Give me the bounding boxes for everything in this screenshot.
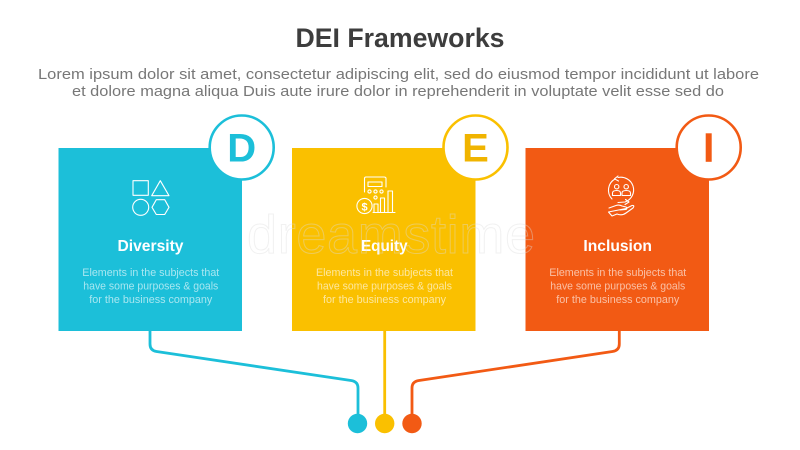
connector: diversity line — [150, 331, 358, 416]
dot: inclusion — [402, 414, 422, 433]
watermark: dreamstime — [247, 205, 535, 265]
icon: shapes — [133, 181, 169, 215]
description: diversity: have some purposes & goals — [83, 280, 219, 292]
description: diversity: for the business company — [89, 294, 213, 306]
subtitle text: Lorem ipsum dolor sit amet, consectetur adipiscing elit, sed do eiusmod tempor incididunt ut labore — [38, 66, 759, 83]
title: DEI Frameworks — [296, 23, 504, 53]
description: inclusion — [549, 267, 686, 306]
icon: calculator and chart: $ — [361, 202, 368, 214]
subtitle text: et dolore magna aliqua Duis aute irure dolor in reprehenderit in voluptate velit esse sed do — [72, 83, 724, 100]
subtitle text — [38, 66, 759, 100]
panel: equity — [292, 116, 508, 331]
panel: diversity — [58, 116, 274, 331]
badge: I — [677, 116, 741, 180]
dot: equity — [375, 414, 394, 433]
badge: D — [210, 116, 274, 180]
badge: D: D — [227, 126, 256, 170]
connector: inclusion line — [412, 331, 619, 416]
heading: diversity: Diversity — [118, 238, 184, 255]
description: inclusion: have some purposes & goals — [550, 280, 686, 292]
description: equity: Elements in the subjects that — [316, 267, 453, 279]
description: equity — [316, 267, 453, 306]
description: equity: have some purposes & goals — [317, 280, 452, 292]
icon: calculator and chart — [357, 177, 395, 214]
description: equity: for the business company — [323, 294, 446, 306]
panel: inclusion — [526, 116, 741, 331]
badge: E — [444, 116, 508, 180]
description: inclusion: for the business company — [556, 294, 680, 306]
description: diversity: Elements in the subjects that — [82, 267, 219, 279]
heading: inclusion: Inclusion — [583, 238, 652, 255]
description: diversity — [82, 267, 219, 306]
description: inclusion: Elements in the subjects that — [549, 267, 686, 279]
icon: people in cycle held by hand — [608, 176, 634, 216]
connector: equity line — [383, 331, 386, 416]
heading: equity: Equity — [361, 238, 408, 255]
dot: diversity — [348, 414, 367, 433]
badge: E: E — [462, 126, 489, 170]
